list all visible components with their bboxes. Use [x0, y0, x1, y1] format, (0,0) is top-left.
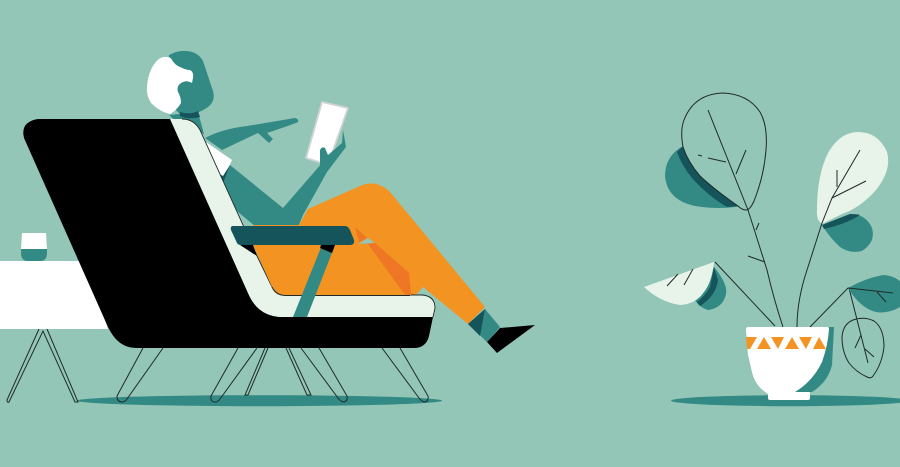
chair cushion: [170, 119, 435, 317]
outlined lower leaf: [842, 318, 884, 378]
neck: [169, 112, 204, 134]
chair body: [23, 119, 433, 348]
right teal leaf: [848, 275, 900, 312]
shoe: [487, 325, 535, 353]
leg shade: [355, 227, 367, 242]
shirt: [206, 142, 232, 180]
chair legs: [117, 348, 428, 402]
armrest: [231, 226, 354, 245]
floor shadow: plant: [671, 395, 900, 406]
pointing arm: [205, 118, 298, 150]
cream upper leaf: [817, 132, 888, 224]
side table with glass: [0, 233, 108, 402]
pot triangles: [746, 337, 826, 349]
pot: [746, 327, 829, 400]
pot shadow: [795, 327, 834, 392]
torso and raised arm: [222, 163, 327, 232]
person: [147, 51, 535, 353]
armrest strut: [293, 245, 335, 317]
knee gap: [358, 238, 375, 244]
hand: [320, 130, 346, 172]
leg rest over cushion: [253, 245, 410, 295]
under-leg shade: [368, 243, 411, 296]
outlined upper leaf: [682, 93, 766, 210]
tablet: [306, 102, 348, 163]
head: [165, 51, 214, 114]
ankle: [468, 309, 500, 342]
legs: [253, 184, 485, 324]
left leaf: [694, 267, 726, 310]
plant: [644, 93, 900, 400]
stems and veins: [698, 110, 893, 363]
floor shadow: chair: [77, 395, 442, 406]
leaf shadows: [665, 146, 741, 208]
hair: [147, 57, 193, 114]
chair: [23, 119, 435, 348]
